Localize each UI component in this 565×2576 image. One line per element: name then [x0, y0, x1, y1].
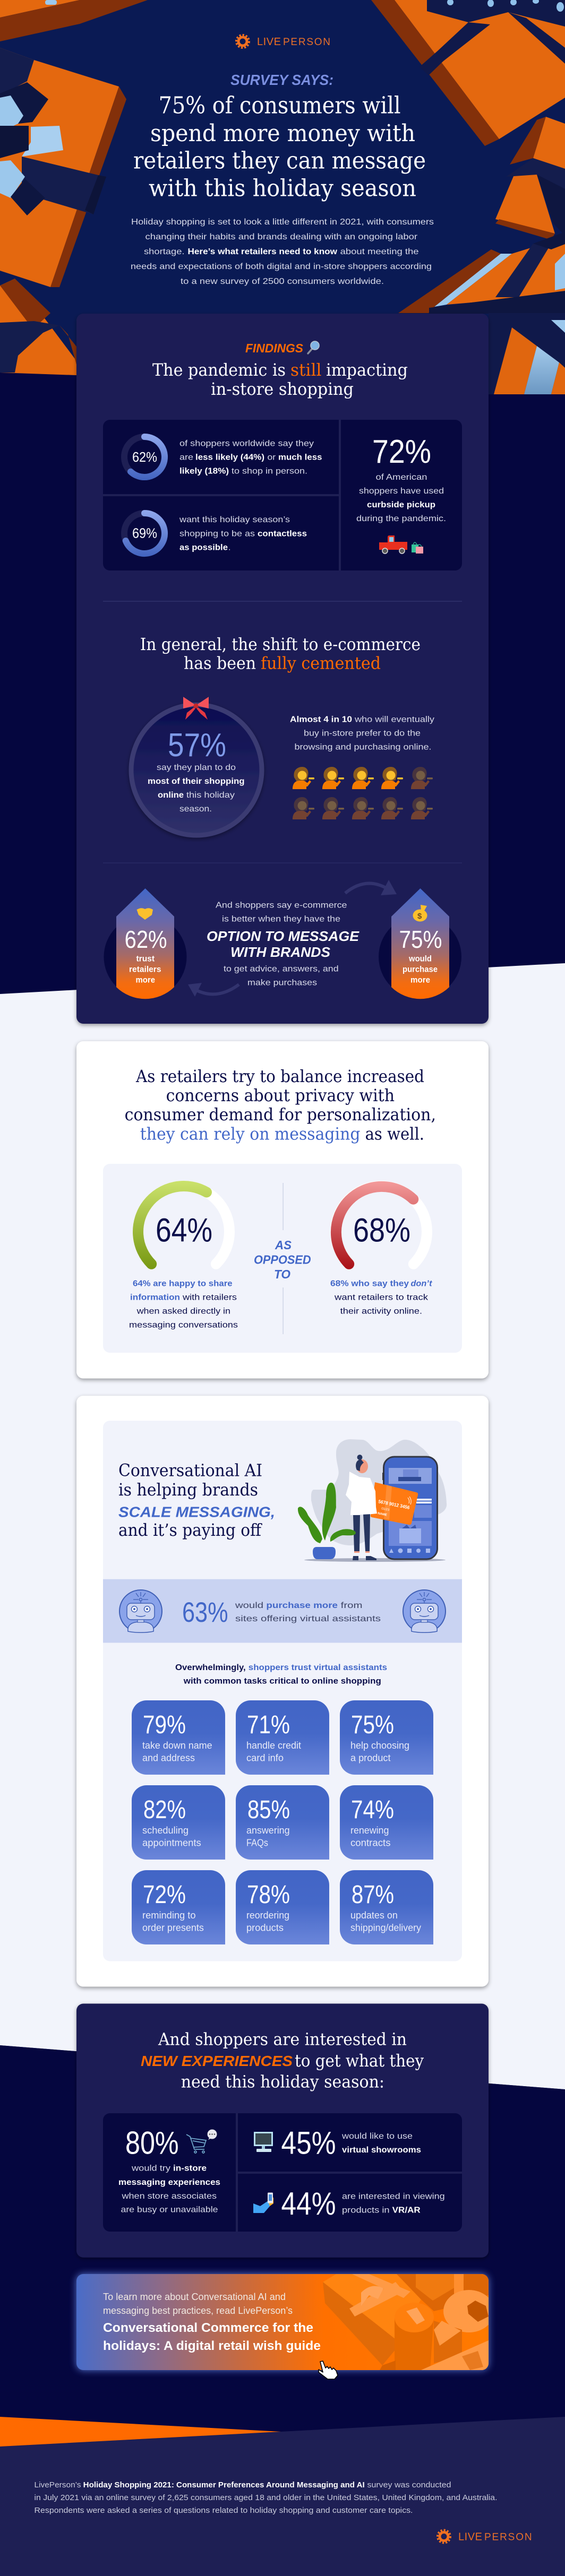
- text: almost 4 in 10: Almost 4 in 10: [290, 715, 352, 724]
- text: less likely: much less: [278, 453, 322, 462]
- heading: privacy: consumer demand for personalization,: [125, 1104, 436, 1125]
- text: option to message: WITH BRANDS: [230, 944, 331, 960]
- text: contactless: [179, 515, 307, 552]
- stat: 45% virtual showrooms: [281, 2125, 421, 2161]
- text: less likely: are: [179, 453, 193, 462]
- badge: 75% would purchase more: 75%: [399, 926, 442, 953]
- icon: handshake: [137, 908, 153, 920]
- gift: bottom right: [398, 232, 565, 394]
- text: option to message: [207, 901, 359, 988]
- text: less likely: or: [268, 453, 276, 462]
- stat circle: 57%: most of their shopping: [148, 777, 245, 786]
- stat: 44% VR/AR: VR/AR: [392, 2206, 421, 2215]
- badge: 75% would purchase more: more: [410, 976, 430, 985]
- stat: 63%: 63%: [182, 1597, 228, 1628]
- caption: don't track: want retailers to track: [334, 1293, 429, 1302]
- heading: conversational AI: [118, 1460, 275, 1540]
- heading: pandemic: still: [290, 360, 322, 380]
- tile: 82%: 82%: [143, 1796, 186, 1824]
- stat: 72% curbside: 72%: [372, 434, 431, 470]
- heading: new experiences: NEW EXPERIENCES: [141, 2053, 293, 2069]
- tile: 85%: FAQs: [246, 1838, 268, 1848]
- text: option to message: to get advice, answers, and: [224, 965, 339, 974]
- panel: pandemic stats: [103, 420, 462, 570]
- caption: happy to share: information: [130, 1293, 180, 1302]
- stat circle: 57%: online: [158, 791, 184, 800]
- text: almost 4 in 10: who will eventually: [354, 715, 434, 724]
- pictogram: 4 of 10 people: [293, 767, 433, 819]
- heading: conversational AI: SCALE MESSAGING,: [118, 1504, 275, 1520]
- icon: robot right: [403, 1590, 446, 1632]
- tile: 72%: 72%: [143, 1881, 186, 1909]
- icon: desktop computer: [254, 2132, 273, 2152]
- gauge chart: 64%: 64%: [156, 1212, 212, 1249]
- divider: [103, 601, 462, 602]
- gift: top right: [371, 0, 565, 146]
- icon: robot left: [119, 1590, 162, 1632]
- badge: 75% would purchase more: [379, 888, 461, 999]
- panel: findings card: [76, 314, 489, 1024]
- intro paragraph: about meeting the: [340, 247, 419, 256]
- label: as opposed to: [254, 1238, 311, 1281]
- tile: 79%: take down name: [142, 1740, 212, 1751]
- heading: conversational AI: and it’s paying off: [118, 1520, 262, 1540]
- heading: privacy: as well.: [365, 1124, 424, 1144]
- arrow: to left badge: [188, 983, 239, 997]
- text: less likely: less likely (44%): [195, 453, 264, 462]
- tile: 78%: [236, 1870, 329, 1944]
- tile: 78%: 78%: [247, 1881, 290, 1909]
- heading: e-commerce: [140, 634, 421, 673]
- text: purchase more: from: [341, 1601, 362, 1610]
- heading: pandemic: in-store shopping: [211, 379, 354, 399]
- intro paragraph: needs and expectations of both digital and in-store shoppers according: [131, 262, 432, 271]
- text: guide title: messaging best practices, read LivePerson’s: [103, 2305, 293, 2316]
- title: spend more money with: [150, 120, 415, 147]
- badge: 62% trust retailers: [104, 888, 187, 999]
- caption: happy to share: 64% are happy to share: [133, 1280, 233, 1289]
- heading: privacy: concerns about privacy with: [166, 1085, 395, 1105]
- text: contactless: shopping to be as: [179, 530, 255, 539]
- illustration: shopper with phone and card: [298, 1439, 447, 1562]
- stat: 45% virtual showrooms: 45%: [281, 2125, 336, 2161]
- heading: new experiences: need this holiday season:: [181, 2072, 384, 2092]
- tile: 87%: 87%: [352, 1881, 394, 1909]
- tile: 79%: and address: [142, 1753, 195, 1764]
- tile: 85%: 85%: [247, 1796, 290, 1824]
- badge: 75% would purchase more: would: [408, 955, 432, 964]
- label: as opposed to: AS: [275, 1238, 292, 1252]
- icon: pickup truck: [379, 535, 407, 554]
- badge: 62% trust retailers: more: [136, 976, 155, 985]
- caption: don't track: [330, 1280, 432, 1316]
- footer note: survey was conducted: [367, 2480, 451, 2489]
- stat: 45% virtual showrooms: would like to use: [341, 2132, 413, 2141]
- intro paragraph: to a new survey of 2500 consumers worldwide.: [181, 277, 384, 286]
- badge: 62% trust retailers: 62%: [125, 926, 167, 953]
- gift: bottom left: [0, 279, 76, 375]
- icon: hand cursor: [319, 2361, 338, 2379]
- logo: LivePerson footer: LIVE: [458, 2531, 482, 2543]
- panel: comparison: [103, 1164, 462, 1353]
- callout: read the guide banner: [76, 2274, 494, 2379]
- donut chart: 62%: [124, 437, 165, 477]
- tile: 71%: [236, 1700, 329, 1775]
- intro paragraph: [131, 218, 434, 286]
- panel: privacy card: [76, 1041, 489, 1379]
- stat: 72% curbside: shoppers have used: [359, 487, 444, 496]
- heading: new experiences: to get what they: [295, 2051, 424, 2071]
- tile: 82%: appointments: [142, 1838, 201, 1848]
- text: guide title: To learn more about Conversational AI and: [103, 2292, 286, 2302]
- divider: [103, 862, 462, 863]
- tile: 85%: answering: [246, 1825, 290, 1836]
- tile: 72%: order presents: [142, 1923, 204, 1933]
- panel: experience stats: [103, 2113, 462, 2232]
- caption: happy to share: with retailers: [182, 1293, 237, 1302]
- tile: 74%: [340, 1785, 433, 1860]
- tile: 74%: 74%: [351, 1796, 394, 1824]
- logo: LivePerson footer: PERSON: [484, 2531, 532, 2543]
- tile: 87%: [340, 1870, 433, 1944]
- text: purchase more: would: [235, 1601, 263, 1610]
- gauge chart: 64%: [138, 1186, 229, 1264]
- footer note: LivePerson’s: [34, 2480, 81, 2489]
- gauge chart: 68%: [336, 1186, 427, 1264]
- text: contactless: contactless: [258, 530, 307, 539]
- kicker: survey says: SURVEY SAYS:: [230, 72, 333, 88]
- tile: 79%: [132, 1700, 225, 1775]
- text: less likely: [179, 439, 322, 476]
- tile: 79%: 79%: [143, 1711, 186, 1739]
- heading: pandemic: The pandemic is: [152, 360, 286, 380]
- tile: 87%: shipping/delivery: [350, 1923, 421, 1933]
- subheading: trust virtual assistants: with common tasks critical to online shopping: [183, 1677, 381, 1686]
- tile: 72%: reminding to: [142, 1910, 195, 1921]
- icon: speech bubble: [207, 2129, 217, 2140]
- donut chart: 62%: 62%: [132, 449, 157, 465]
- tile: 75%: 75%: [351, 1711, 394, 1739]
- badge: 62% trust retailers: retailers: [129, 965, 161, 974]
- subheading: trust virtual assistants: shoppers trust virtual assistants: [249, 1663, 387, 1672]
- stat: 80% in-store messaging: are busy or unavailable: [121, 2206, 218, 2215]
- text: less likely: to shop in person.: [232, 467, 307, 476]
- heading: e-commerce: fully cemented: [261, 653, 381, 673]
- text: guide title: [103, 2292, 321, 2353]
- illustration: shopper with phone and card: 5678 9012 3456: [378, 1499, 410, 1510]
- heading: privacy: [125, 1066, 436, 1144]
- text: purchase more: sites offering virtual assistants: [235, 1614, 381, 1623]
- stat: 72% curbside: [356, 434, 446, 523]
- tile: 72%: [132, 1870, 225, 1944]
- subheading: trust virtual assistants: [175, 1663, 387, 1686]
- text: option to message: make purchases: [247, 979, 317, 988]
- icon: money bag: $: [417, 912, 422, 921]
- tile: 71%: card info: [246, 1753, 284, 1764]
- stat: 72% curbside: of American: [376, 473, 427, 482]
- logo: LivePerson top: PERSON: [283, 37, 330, 48]
- heading: conversational AI: Conversational AI: [118, 1460, 262, 1481]
- label: as opposed to: OPPOSED: [254, 1253, 311, 1267]
- intro paragraph: shortage.: [144, 247, 185, 256]
- tile: 85%: [236, 1785, 329, 1860]
- caption: don't track: their activity online.: [340, 1307, 422, 1316]
- stat circle: 57%: say they plan to do: [157, 763, 236, 772]
- footer note: Holiday Shopping 2021: Consumer Preferences Around Messaging and AI: [83, 2480, 365, 2489]
- heading: pandemic: impacting: [326, 360, 408, 380]
- gift: right middle: [495, 117, 565, 240]
- heading: privacy: As retailers try to balance increased: [135, 1066, 424, 1086]
- stat: 44% VR/AR: [281, 2186, 445, 2221]
- caption: happy to share: when asked directly in: [136, 1307, 230, 1316]
- text: contactless: want this holiday season’s: [179, 515, 290, 524]
- stat: 44% VR/AR: 44%: [281, 2186, 336, 2221]
- intro paragraph: Holiday shopping is set to look a little different in 2021, with consumers: [131, 218, 434, 227]
- tile: 78%: products: [246, 1923, 284, 1933]
- tile: 71%: handle credit: [246, 1740, 301, 1751]
- stat circle: 57%: season.: [179, 805, 212, 814]
- icon: magnifying glass: [308, 341, 319, 353]
- light middle background: [0, 963, 565, 2089]
- tile: 75%: [340, 1700, 433, 1775]
- heading: conversational AI: is helping brands: [118, 1480, 258, 1500]
- gift: left with bow: [0, 48, 126, 287]
- text: option to message: OPTION TO MESSAGE: [207, 928, 359, 944]
- text: almost 4 in 10: buy in-store prefer to do the: [304, 729, 421, 738]
- text: purchase more: [235, 1601, 381, 1623]
- tile: 82%: [132, 1785, 225, 1860]
- subheading: trust virtual assistants: Overwhelmingly,: [175, 1663, 246, 1672]
- icon: money bag: [413, 905, 427, 921]
- text: contactless: .: [228, 543, 230, 552]
- caption: don't track: 68% who say they: [330, 1280, 409, 1289]
- tile: 82%: scheduling: [142, 1825, 189, 1836]
- stat: 44% VR/AR: are interested in viewing: [342, 2192, 445, 2201]
- text: option to message: And shoppers say e-commerce: [216, 901, 347, 910]
- icon: hand holding phone: [253, 2193, 273, 2213]
- tile: 74%: renewing: [350, 1825, 389, 1836]
- text: almost 4 in 10: browsing and purchasing online.: [294, 743, 431, 752]
- title: with this holiday season: [149, 175, 416, 202]
- stat: 80% in-store messaging: 80%: [125, 2125, 179, 2161]
- title: retailers they can message: [133, 148, 426, 175]
- intro paragraph: Here’s what retailers need to know: [188, 247, 338, 256]
- badge: 62% trust retailers: trust: [136, 955, 155, 964]
- donut chart: 69%: 69%: [132, 525, 157, 541]
- panel: conversational AI card: [76, 1396, 489, 1987]
- bottom dark background: [0, 2045, 565, 2441]
- caption: don't track: don’t: [411, 1280, 432, 1289]
- title: 75% of consumers will: [159, 92, 401, 119]
- band: 63% virtual assistants: [103, 1579, 462, 1643]
- logo: LivePerson top: LIVE: [257, 36, 281, 48]
- stat: 72% curbside: curbside pickup: [367, 500, 435, 509]
- heading: privacy: they can rely on messaging: [140, 1124, 360, 1144]
- heading: e-commerce: In general, the shift to e-commerce: [140, 634, 421, 654]
- panel: new experiences card: [76, 2004, 489, 2258]
- title: [133, 92, 426, 202]
- icon: shopping cart: [186, 2134, 206, 2153]
- arrow: to right badge: [345, 880, 397, 895]
- stat: 72% curbside: during the pandemic.: [356, 514, 446, 523]
- text: option to message: is better when they have the: [222, 915, 340, 924]
- stat circle: 57%: [131, 705, 262, 835]
- text: purchase more: purchase more: [266, 1601, 338, 1610]
- label: as opposed to: TO: [274, 1267, 290, 1281]
- stat: 80% in-store messaging: messaging experiences: [118, 2178, 220, 2187]
- heading: new experiences: And shoppers are interested in: [158, 2029, 407, 2050]
- badge: 75% would purchase more: purchase: [403, 965, 438, 974]
- logo: LivePerson top: [236, 35, 330, 48]
- icon: red bow: [183, 697, 209, 720]
- gift: top left: [0, 0, 148, 41]
- text: almost 4 in 10: [290, 715, 434, 752]
- heading: e-commerce: has been: [184, 653, 256, 673]
- hero background: [0, 0, 565, 394]
- tile: 75%: a product: [350, 1753, 391, 1764]
- tile: 71%: 71%: [247, 1711, 290, 1739]
- text: less likely: likely (18%): [179, 467, 229, 476]
- illustration: shopper with phone and card: 01/23: [381, 1507, 390, 1512]
- caption: happy to share: messaging conversations: [129, 1320, 238, 1330]
- heading: pandemic: [152, 360, 408, 399]
- footer note: in July 2021 via an online survey of 2,625 consumers aged 18 and older in the United States, United Kingdom, and Australia.: [34, 2493, 497, 2502]
- stat: 80% in-store messaging: when store associates: [121, 2192, 217, 2201]
- kicker: findings: FINDINGS: [245, 341, 304, 355]
- stat: 80% in-store messaging: in-store: [173, 2164, 207, 2173]
- footer background: [0, 2417, 565, 2576]
- heading: new experiences: [141, 2029, 424, 2092]
- tile: 74%: contracts: [350, 1838, 391, 1848]
- donut chart: 69%: [124, 513, 165, 554]
- stat: 44% VR/AR: products in: [342, 2206, 390, 2215]
- text: less likely: of shoppers worldwide say they: [179, 439, 314, 448]
- gauge chart: 68%: 68%: [353, 1212, 410, 1249]
- text: guide title: Conversational Commerce for the: [103, 2321, 313, 2335]
- footer note: [34, 2480, 497, 2515]
- stat: 80% in-store messaging: would try: [131, 2164, 170, 2173]
- stat: 45% virtual showrooms: virtual showrooms: [342, 2146, 421, 2155]
- stat: 80% in-store messaging: [118, 2125, 220, 2215]
- tile: 78%: reordering: [246, 1910, 289, 1921]
- intro paragraph: changing their habits and brands dealing with an ongoing labor: [145, 232, 418, 241]
- footer note: Respondents were asked a series of questions related to holiday shopping and customer care topics.: [34, 2506, 413, 2515]
- logo: LivePerson footer: [438, 2530, 532, 2543]
- illustration: shopper with phone and card: NAME: [378, 1512, 387, 1517]
- icon: shopping bags: [412, 542, 423, 554]
- tile: 87%: updates on: [350, 1910, 398, 1921]
- stat circle: 57%: this holiday: [186, 791, 235, 800]
- illustration: orange gifts: [323, 2274, 494, 2370]
- caption: happy to share: [129, 1280, 238, 1330]
- orange wedge: [0, 2417, 281, 2447]
- text: guide title: holidays: A digital retail wish guide: [103, 2339, 321, 2353]
- text: contactless: as possible: [179, 543, 228, 552]
- tile: 75%: help choosing: [350, 1740, 409, 1751]
- stat circle: 57%: 57%: [168, 727, 226, 764]
